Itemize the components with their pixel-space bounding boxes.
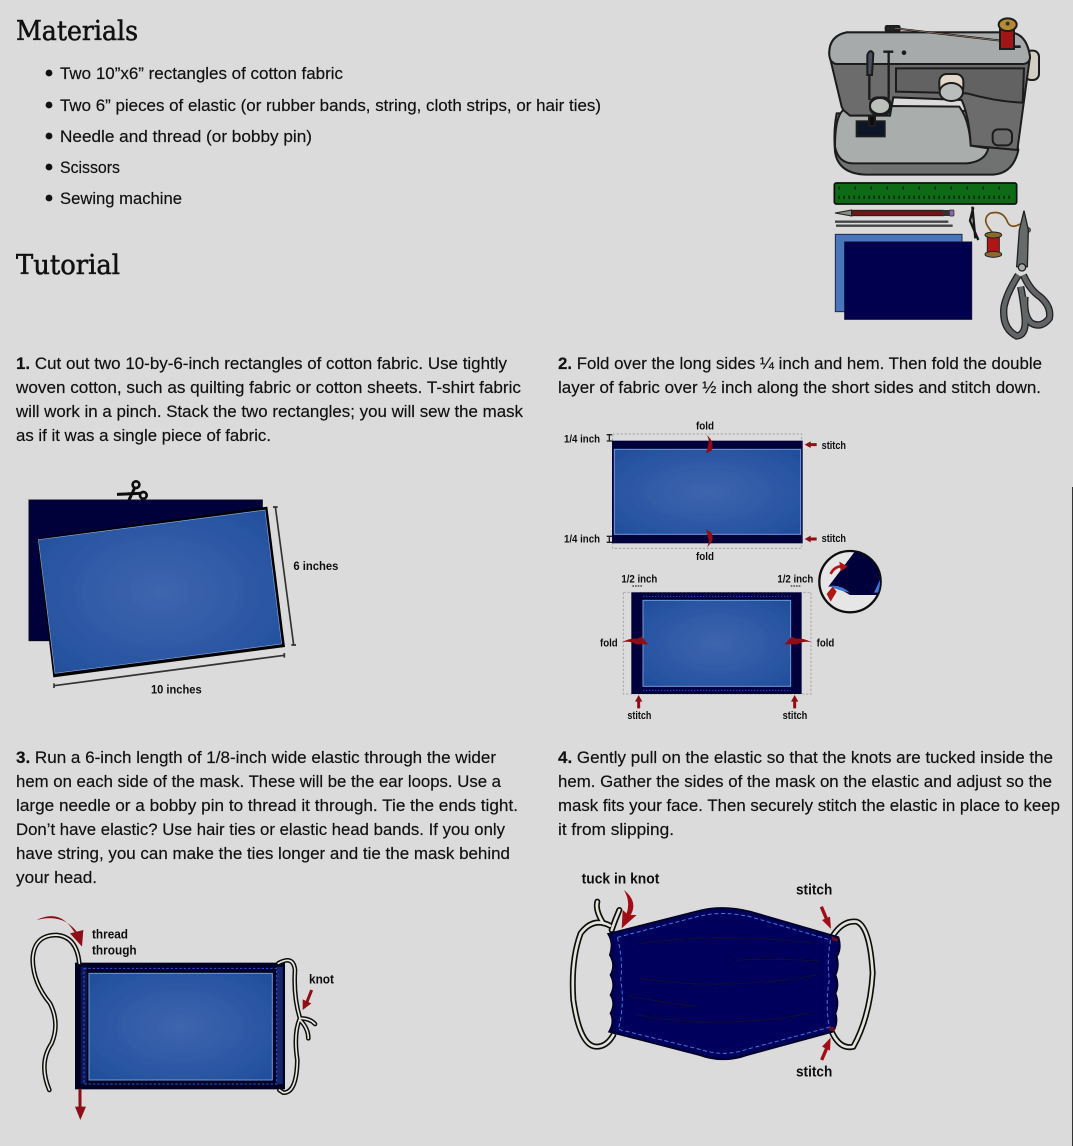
icon: scissors xyxy=(1004,211,1050,336)
ear loops xyxy=(573,902,873,1047)
bottom panel: short side folds: fold xyxy=(817,638,834,650)
icon: ruler xyxy=(834,183,1017,204)
top panel: long side hems: stitch xyxy=(822,533,846,545)
step 2 text: 2. Fold over the long sides ¼ inch and hem. Then fold the double xyxy=(558,354,1042,373)
step 1 text: will work in a pinch. Stack the two rectangles; you will sew the mask xyxy=(15,402,524,421)
step 1 text: woven cotton, such as quilting fabric or cotton sheets. T-shirt fabric xyxy=(15,378,521,397)
step 1 text xyxy=(15,354,524,445)
bottom panel: short side folds: 1/2 inch xyxy=(777,573,814,585)
arrow: knot xyxy=(303,990,312,1010)
dimension: 10 inches: 10 inches xyxy=(151,682,202,696)
front fabric rectangle xyxy=(37,507,285,677)
step 4 text: it from slipping. xyxy=(558,820,674,839)
heading: Materials: Materials xyxy=(16,16,138,47)
labels: stitch xyxy=(796,1065,832,1081)
materials list: Scissors xyxy=(60,158,120,177)
back fabric rectangle xyxy=(29,500,262,641)
top panel: long side hems: 1/4 inch xyxy=(564,534,600,546)
icon: fabric pieces xyxy=(835,234,972,319)
diagram: cut two rectangles xyxy=(29,481,338,696)
materials list xyxy=(46,64,601,208)
top panel: long side hems: fold xyxy=(696,551,714,563)
hemmed fabric xyxy=(75,963,285,1089)
illustration: sewing supplies xyxy=(829,18,1050,336)
materials list: Two 6” pieces of elastic (or rubber bands, string, cloth strips, or hair ties) xyxy=(60,96,601,115)
step 2 text xyxy=(558,354,1042,397)
top panel: long side hems: stitch xyxy=(822,440,846,452)
step 4 text xyxy=(558,748,1060,839)
step 4 text: hem. Gather the sides of the mask on the elastic and adjust so the xyxy=(558,772,1052,791)
step 1 text: 1. Cut out two 10-by-6-inch rectangles of cotton fabric. Use tightly xyxy=(16,354,508,373)
icon: needles xyxy=(835,222,953,226)
materials list: Needle and thread (or bobby pin) xyxy=(60,127,312,146)
icon: small scissors xyxy=(117,481,147,500)
dimension: 10 inches xyxy=(54,653,284,696)
bottom panel: short side folds: fold xyxy=(600,638,618,650)
arrow: top stitch xyxy=(821,907,831,929)
bottom panel: short side folds: stitch xyxy=(627,710,652,722)
arrow: curved entry xyxy=(37,916,83,947)
materials list: Two 10”x6” rectangles of cotton fabric xyxy=(60,64,343,83)
dimension: 6 inches: 6 inches xyxy=(293,559,338,573)
top panel: long side hems xyxy=(564,420,846,563)
labels: stitch xyxy=(796,882,832,898)
step 4 text: mask fits your face. Then securely stitch the elastic in place to keep xyxy=(558,796,1060,815)
heading: Tutorial: Tutorial xyxy=(16,250,120,281)
labels xyxy=(582,871,832,1081)
stitch marks xyxy=(829,936,838,1031)
dimension: 6 inches xyxy=(273,507,338,645)
step 4 text: 4. Gently pull on the elastic so that the knots are tucked inside the xyxy=(558,748,1053,767)
diagram: fold and stitch xyxy=(564,420,883,722)
top panel: long side hems: 1/4 inch xyxy=(564,434,600,446)
bottom panel: short side folds: 1/2 inch xyxy=(621,573,658,585)
step 3 text: your head. xyxy=(16,868,97,887)
labels xyxy=(92,926,334,986)
mask stitching xyxy=(617,913,831,1053)
arrow: tuck in knot xyxy=(622,890,637,928)
labels: tuck in knot xyxy=(582,871,659,887)
step 3 text: have string, you can make the ties longer and tie the mask behind xyxy=(16,844,510,863)
elastic strings xyxy=(33,935,315,1093)
bottom panel: short side folds: stitch xyxy=(783,710,808,722)
step 3 text: Don’t have elastic? Use hair ties or elastic head bands. If you only xyxy=(16,820,506,839)
bottom panel: short side folds xyxy=(600,573,834,722)
icon: pencil xyxy=(835,210,954,216)
labels: through xyxy=(92,942,137,957)
mask pleats xyxy=(627,938,820,1022)
arrow: pull down xyxy=(75,1089,86,1120)
top panel: long side hems: fold xyxy=(696,420,714,432)
step 3 text: 3. Run a 6-inch length of 1/8-inch wide elastic through the wider xyxy=(16,748,496,767)
arrow: bottom stitch xyxy=(822,1038,831,1060)
icon: sewing machine xyxy=(829,18,1039,175)
icon: bobby pin xyxy=(970,207,978,240)
icon: thread spool xyxy=(985,212,1020,257)
step 1 text: as if it was a single piece of fabric. xyxy=(16,426,271,445)
step 3 text: hem on each side of the mask. These will be the ear loops. Use a xyxy=(16,772,502,791)
materials list: Sewing machine xyxy=(60,189,182,208)
labels: knot xyxy=(309,971,334,986)
diagram: finished mask xyxy=(573,871,873,1081)
diagram: thread elastic through hem xyxy=(33,916,334,1120)
inset: corner fold detail xyxy=(819,550,883,612)
step 3 text xyxy=(16,748,518,887)
step 2 text: layer of fabric over ½ inch along the short sides and stitch down. xyxy=(558,378,1041,397)
step 3 text: large needle or a bobby pin to thread it through. Tie the ends tight. xyxy=(16,796,518,815)
labels: thread xyxy=(92,926,128,941)
mask body xyxy=(608,908,840,1059)
